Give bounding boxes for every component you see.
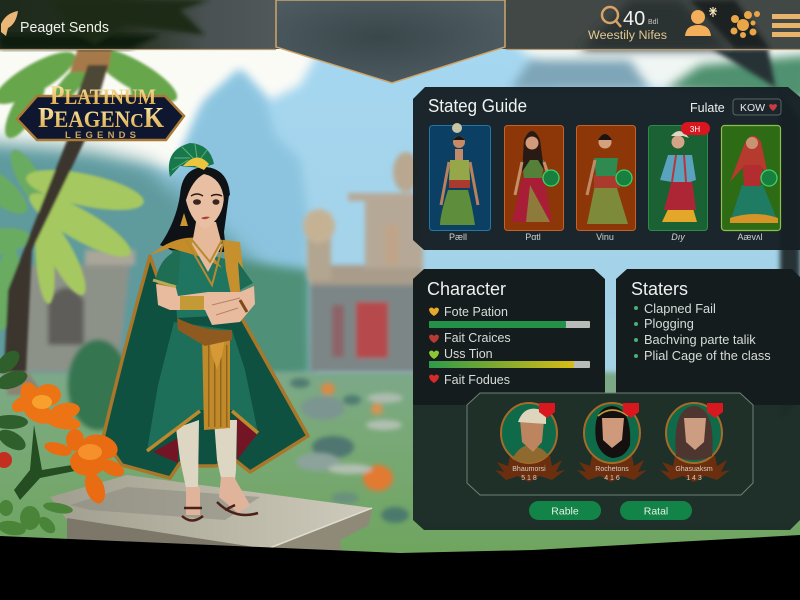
flower 2 — [43, 429, 127, 506]
game logo — [17, 80, 184, 141]
filter button: KOW — [740, 102, 765, 114]
card 3: Vinu — [596, 232, 614, 242]
stat row 1: Fote Pation — [444, 305, 508, 319]
stat row 2: Fait Craices — [444, 331, 511, 345]
game logo: PEAGENCK — [38, 103, 164, 134]
portrait 2 — [577, 403, 647, 482]
dark foreground leaf at right — [712, 49, 800, 420]
card 4: Dıy — [671, 232, 685, 242]
search icon — [602, 7, 621, 27]
card 5 — [722, 126, 780, 242]
flower 1 — [9, 380, 82, 432]
network icon — [730, 11, 760, 38]
portrait 3 — [660, 403, 730, 482]
card 4: 3H — [690, 125, 700, 134]
cape — [103, 256, 308, 478]
legs — [176, 420, 237, 488]
green dress — [147, 322, 258, 451]
progress bar 1 — [429, 321, 590, 328]
button: Rable — [529, 501, 601, 520]
card 1: Pæll — [449, 232, 467, 242]
brand name: Peaget Sends — [20, 19, 109, 36]
game logo: LEGENDS — [65, 130, 136, 141]
top navigation bar — [0, 0, 800, 83]
stat row 3: Uss Tion — [444, 347, 493, 361]
filter label: Fulate — [690, 101, 725, 115]
sandals — [182, 502, 258, 520]
panel: lower backdrop — [413, 395, 800, 530]
palm trees — [0, 39, 184, 395]
weekly stat: 40 — [623, 8, 645, 30]
bullet list: Clapned Fail — [644, 301, 716, 316]
golden shawl — [150, 238, 222, 268]
panel: strategy guide — [413, 87, 800, 250]
trunk — [4, 138, 86, 372]
orange flowers foreground — [0, 346, 127, 537]
golden fringe — [202, 333, 230, 430]
arms and hands — [156, 284, 255, 325]
card 1 — [430, 123, 490, 242]
filter button — [733, 99, 781, 115]
temple — [303, 152, 423, 372]
top navigation bar: Bdl — [648, 19, 659, 26]
menu icon — [772, 14, 800, 37]
button: Ratal — [620, 501, 692, 520]
bullet list: Plogging — [644, 316, 694, 331]
card 3 — [576, 126, 636, 242]
stat row 4: Fait Fodues — [444, 373, 510, 387]
bullet list: Plial Cage of the class — [644, 348, 771, 363]
distant ruin — [15, 250, 135, 372]
brand feather icon — [1, 11, 18, 36]
portrait 1 — [495, 403, 565, 482]
red badge — [681, 122, 710, 135]
button: Rable: Rable — [551, 506, 579, 518]
face — [184, 172, 224, 229]
feather headdress — [169, 143, 214, 177]
heading: Character — [427, 279, 506, 299]
bullet list — [634, 301, 771, 363]
portrait 3: Ghasuaksm — [675, 466, 713, 473]
belt — [177, 318, 232, 346]
eyes and lips — [193, 199, 220, 205]
card 2 — [504, 126, 564, 242]
hair back — [160, 167, 229, 252]
portrait 2: Rochetons — [595, 466, 629, 473]
progress bar 2 — [429, 361, 590, 368]
upper fronds — [0, 39, 184, 143]
panel: team portraits — [467, 393, 753, 495]
bottom black band — [0, 535, 800, 600]
neck and necklace — [192, 222, 222, 272]
main character — [103, 143, 308, 520]
earring — [180, 213, 188, 226]
profile icon — [685, 7, 717, 36]
red lining — [153, 412, 258, 463]
portrait 3: 1 4 3 — [686, 475, 702, 482]
panel: staters — [616, 269, 800, 405]
heading: Staters — [631, 279, 688, 299]
card 5: Aævʌl — [737, 232, 763, 242]
button: Ratal: Ratal — [644, 506, 668, 518]
shrubs, rocks and orange blooms — [68, 340, 409, 523]
game logo: PLATINUM — [50, 80, 156, 110]
card 4 — [648, 122, 710, 242]
portrait 2: 4 1 6 — [604, 475, 620, 482]
lower fronds — [0, 145, 57, 334]
portrait 1: Bhaumorsi — [512, 466, 546, 473]
panel: character — [413, 269, 605, 405]
green bodice — [172, 250, 235, 318]
bullet list: Bachving parte talik — [644, 332, 756, 347]
leaves and stems — [0, 346, 30, 454]
portrait 1: 5 1 8 — [521, 475, 537, 482]
panel heading: Stateg Guide — [428, 96, 527, 116]
stone pedestal — [50, 475, 372, 556]
top navigation bar: Weestily Nifes — [588, 30, 667, 42]
card 2: Pɑtl — [525, 232, 541, 242]
